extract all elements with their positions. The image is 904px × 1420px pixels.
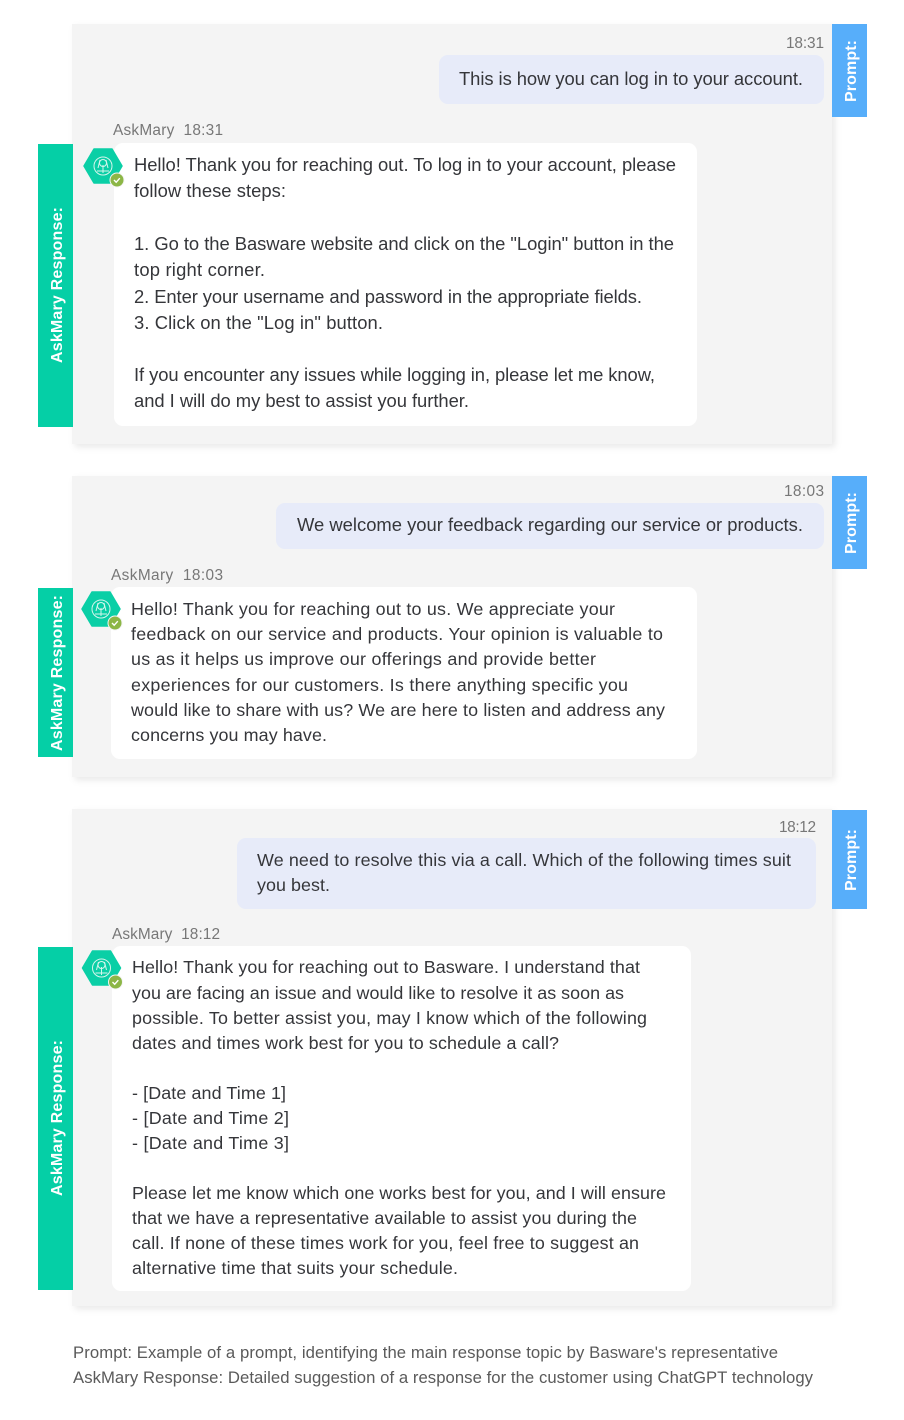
response bubble: 1. Go to the Basware website and click on the "Login" button in the [134,233,674,254]
response bubble: concerns you may have. [131,725,327,745]
sender line: AskMary 18:03 [111,567,223,584]
response bubble: call. If none of these times work for you, feel free to suggest an [132,1233,639,1253]
prompt bubble: This is how you can log in to your account. [459,68,803,89]
response bubble: alternative time that suits your schedule. [132,1258,458,1278]
response bubble: that we have a representative available to assist you during the [132,1208,637,1228]
response label tab [38,588,73,757]
response bubble: If you encounter any issues while logging in, please let me know, [134,364,655,385]
prompt label tab [832,810,867,909]
response bubble: would like to share with us? We are here to listen and address any [130,700,665,720]
response label tab: AskMary Response: [49,1040,66,1196]
response label tab [38,947,73,1290]
icon: AskMary avatar [82,592,122,630]
response bubble: Hello! Thank you for reaching out. To log in to your account, please [134,154,676,175]
response bubble: - [Date and Time 2] [132,1108,289,1128]
panel: feedback example [38,476,867,777]
response bubble: you are facing an issue and would like to resolve it as soon as [132,983,624,1003]
response bubble: Hello! Thank you for reaching out to us. We appreciate your [131,599,615,619]
caption [73,1343,814,1387]
prompt label tab: Prompt: [843,492,860,554]
prompt bubble: We welcome your feedback regarding our service or products. [297,514,803,535]
response bubble: possible. To better assist you, may I know which of the following [132,1008,647,1028]
panel: call scheduling example [38,809,867,1306]
prompt bubble: you best. [257,875,330,895]
response bubble [112,946,691,1291]
response bubble: experiences for our customers. Is there anything specific you [131,675,628,695]
response label tab: AskMary Response: [49,595,66,751]
timestamp: 18:12 [779,819,816,836]
response label tab [38,144,73,427]
response bubble: and I will do my best to assist you further. [134,390,469,411]
caption: AskMary Response: Detailed suggestion of a response for the customer using ChatGPT technology [73,1368,814,1387]
prompt label tab: Prompt: [843,40,860,102]
response label tab: AskMary Response: [49,207,66,363]
response bubble: - [Date and Time 3] [132,1133,289,1153]
response bubble: dates and times work best for you to schedule a call? [132,1033,559,1053]
response bubble: top right corner. [134,259,265,280]
prompt bubble: We need to resolve this via a call. Which of the following times suit [257,850,791,870]
response bubble: follow these steps: [134,180,286,201]
prompt bubble [439,55,824,104]
response bubble: - [Date and Time 1] [132,1083,286,1103]
icon: AskMary avatar [82,951,122,989]
response bubble: 2. Enter your username and password in the appropriate fields. [134,286,642,307]
response bubble: feedback on our service and products. Your opinion is valuable to [131,624,663,644]
prompt label tab [832,476,867,569]
prompt label tab: Prompt: [843,829,860,891]
prompt label tab [832,24,867,117]
timestamp: 18:03 [784,483,824,500]
response bubble [114,143,697,426]
response bubble: Please let me know which one works best for you, and I will ensure [132,1183,666,1203]
prompt bubble [237,838,816,909]
sender line: AskMary 18:31 [113,122,223,139]
panel: login example [38,24,867,444]
response bubble: 3. Click on the "Log in" button. [134,312,383,333]
response bubble [111,587,697,759]
response bubble: us as it helps us improve our offerings and provide better [131,649,596,669]
timestamp: 18:31 [786,35,824,52]
sender line: AskMary 18:12 [112,926,220,943]
response bubble: Hello! Thank you for reaching out to Basware. I understand that [132,957,640,977]
caption: Prompt: Example of a prompt, identifying the main response topic by Basware's representative [73,1343,778,1362]
icon: AskMary avatar [84,149,124,187]
prompt bubble [276,503,824,549]
